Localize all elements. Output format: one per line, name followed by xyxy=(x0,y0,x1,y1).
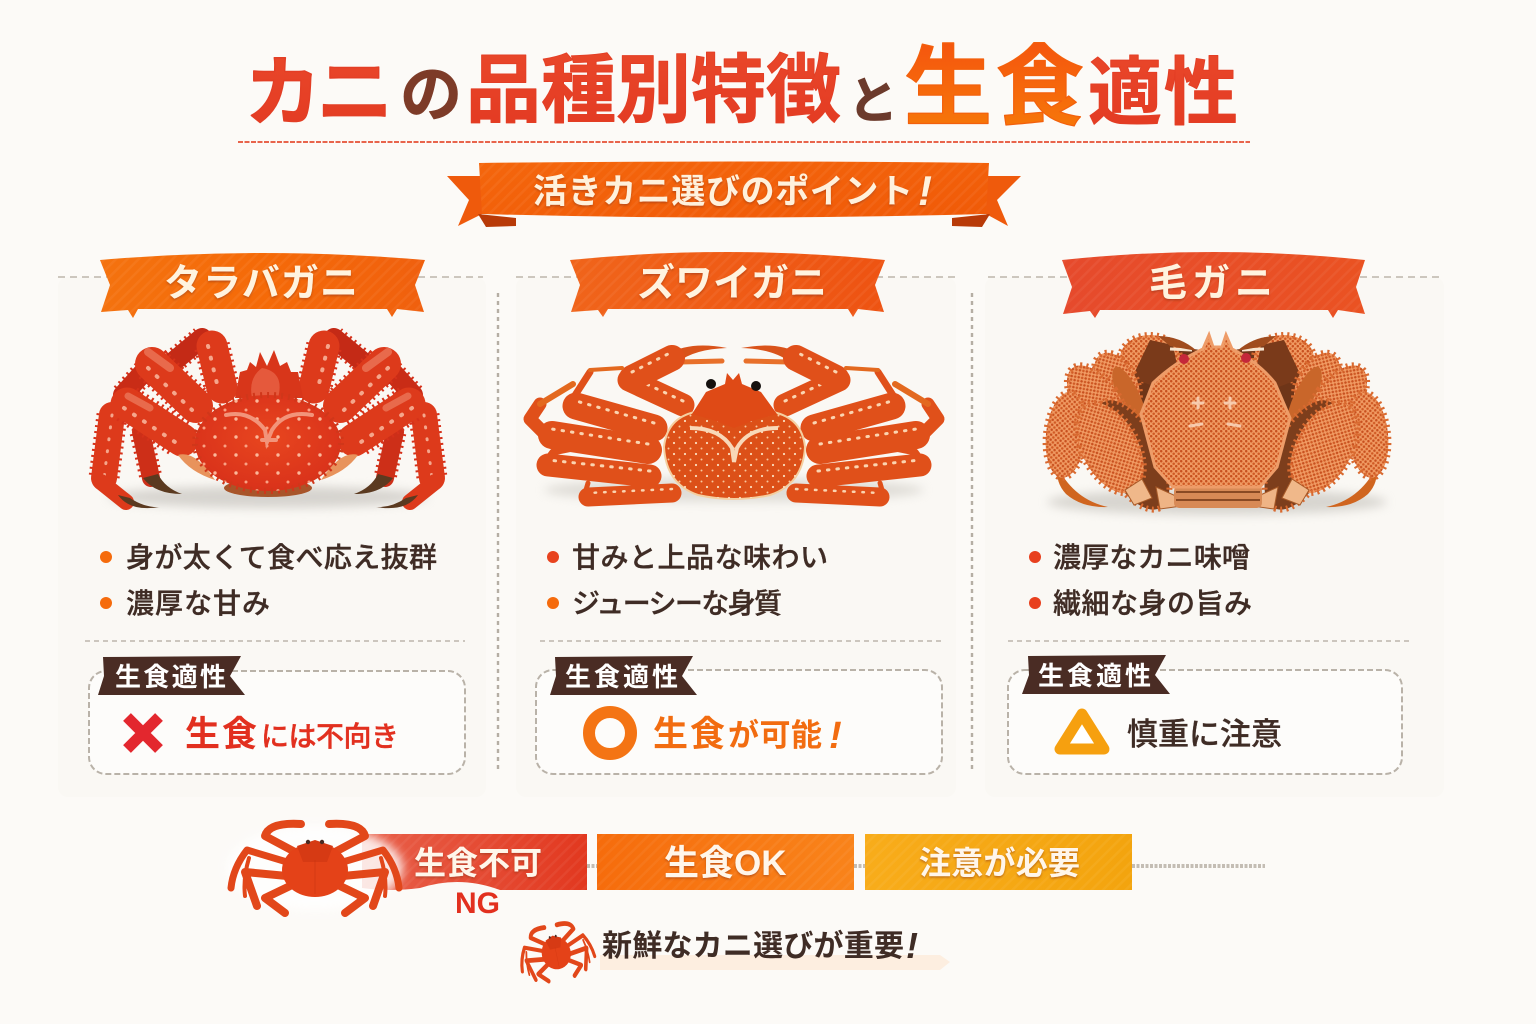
suitability box: タラバガニ: には不向き xyxy=(261,721,399,752)
ribbon: タラバガニ xyxy=(100,253,425,318)
closing message xyxy=(600,925,950,970)
crab icon: closing message xyxy=(514,918,598,986)
title: 生食 xyxy=(904,38,1084,137)
top ribbon: 活きカニ選びのポイント: ! xyxy=(918,167,932,214)
legend: 生食OK xyxy=(597,834,854,890)
crab illustration: 毛ガニ xyxy=(1042,335,1392,521)
suitability box: タラバガニ: 生食 xyxy=(185,715,257,754)
suitability box: タラバガニ xyxy=(89,656,465,774)
crab illustration: ズワイガニ xyxy=(530,346,938,502)
panel: ズワイガニ background xyxy=(516,277,956,797)
closing message: ! xyxy=(906,925,918,966)
suitability box: ズワイガニ: ! xyxy=(829,715,842,757)
legend: 注意が必要 xyxy=(865,834,1132,890)
title: カニ xyxy=(245,51,393,136)
ribbon: タラバガニ: タラバガニ xyxy=(164,263,358,305)
bullet list: ズワイガニ: ジューシーな身質 xyxy=(572,588,782,619)
bullet list: 毛ガニ xyxy=(1029,542,1252,619)
legend: 生食不可: 生食不可 xyxy=(414,845,542,881)
suitability box: ズワイガニ: が可能 xyxy=(728,718,822,753)
NG label: NG xyxy=(455,887,500,920)
legend: 生食OK: 生食OK xyxy=(664,844,787,883)
legend: 注意が必要: 注意が必要 xyxy=(919,845,1080,881)
legend: 生食不可 xyxy=(362,834,587,890)
title: 適性 xyxy=(1088,51,1238,134)
title xyxy=(245,38,1238,137)
bullet list: 毛ガニ: 濃厚なカニ味噌 xyxy=(1053,542,1250,573)
bullet list: タラバガニ: 濃厚な甘み xyxy=(126,588,270,619)
suitability box: ズワイガニ: 生食 xyxy=(653,715,725,754)
ribbon: ズワイガニ xyxy=(570,252,885,317)
crab icon: legend xyxy=(227,824,403,913)
suitability box: 毛ガニ xyxy=(1008,655,1402,774)
crab illustration: タラバガニ xyxy=(101,338,435,508)
top ribbon: 活きカニ選びのポイント: 活きカニ選びのポイント xyxy=(533,173,913,211)
ribbon: ズワイガニ: ズワイガニ xyxy=(637,262,827,305)
bullet list: ズワイガニ xyxy=(547,542,828,619)
bullet list: タラバガニ: 身が太くて食べ応え抜群 xyxy=(126,542,437,573)
panel: 毛ガニ background xyxy=(985,277,1444,797)
panel: タラバガニ background xyxy=(58,277,486,797)
suitability box: タラバガニ: 生食適性 xyxy=(115,662,226,692)
suitability box: ズワイガニ xyxy=(536,656,942,774)
suitability box: 毛ガニ: 慎重に注意 xyxy=(1127,717,1282,752)
top ribbon: 活きカニ選びのポイント xyxy=(447,162,1021,227)
bullet list: ズワイガニ: 甘みと上品な味わい xyxy=(572,542,828,573)
bullet list: タラバガニ xyxy=(100,542,437,619)
title: 品種別特徴 xyxy=(466,48,841,132)
title: の xyxy=(400,61,462,130)
ribbon: 毛ガニ: 毛ガニ xyxy=(1149,263,1273,305)
closing message: 新鮮なカニ選びが重要 xyxy=(602,929,904,963)
bullet list: 毛ガニ: 繊細な身の旨み xyxy=(1053,588,1252,619)
suitability box: ズワイガニ: 生食適性 xyxy=(565,662,678,692)
title: と xyxy=(848,73,898,129)
legend connector xyxy=(587,864,1265,868)
suitability box: 毛ガニ: 生食適性 xyxy=(1038,661,1151,691)
ribbon: 毛ガニ xyxy=(1062,252,1365,318)
